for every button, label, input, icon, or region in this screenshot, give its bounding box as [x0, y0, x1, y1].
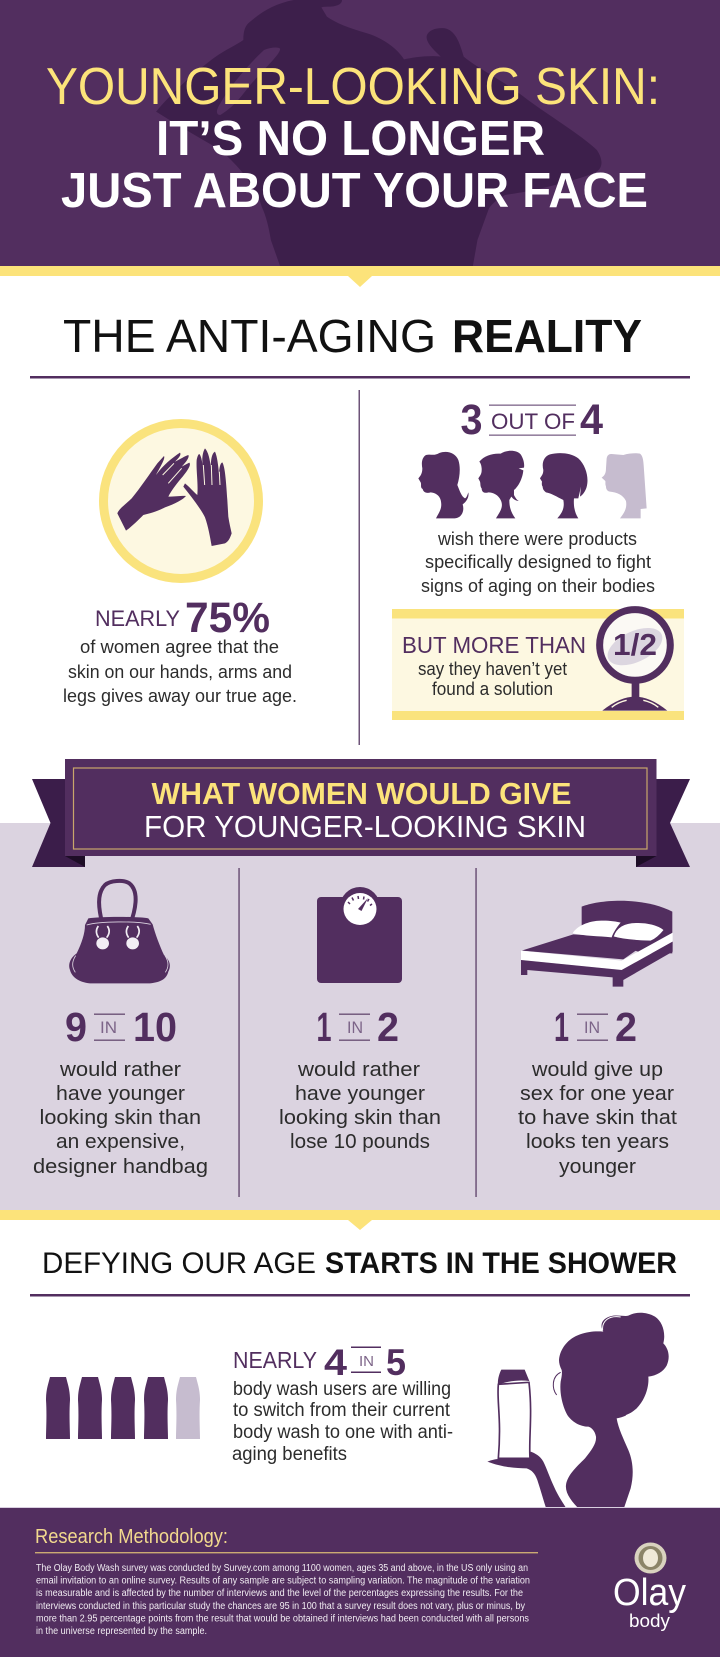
text: methodology: in the universe represented by the sample. [36, 1626, 207, 1637]
stat: 3 out of 4: 4 [580, 396, 603, 444]
icon: bed [521, 901, 673, 987]
text: give up sex [518, 1059, 677, 1178]
stat: 9 in 10: IN [100, 1018, 117, 1037]
title: YOUNGER-LOOKING SKIN: [46, 58, 660, 116]
text: skin gives away age: of women agree that the [80, 637, 279, 657]
text: designer handbag: an expensive, [56, 1131, 185, 1153]
title: IT’S NO LONGER [156, 112, 545, 166]
text: give up sex: would give up [531, 1059, 663, 1081]
text: methodology: email invitation to an online survey. Results of any sample are subject to sampling variation. The magnitude of the variation [36, 1576, 530, 1586]
text: give up sex: younger [559, 1156, 636, 1178]
text: lose 10 pounds: have younger [295, 1083, 425, 1105]
panel: what women would give [0, 759, 720, 1210]
icon: four women heads [418, 451, 647, 518]
stat: 1 in 2 weight: 2 [377, 1004, 399, 1050]
text: skin gives away age: legs gives away our true age. [63, 686, 297, 706]
panel: research methodology footer [0, 1507, 720, 1657]
icon: handbag [69, 881, 170, 983]
title: JUST ABOUT YOUR FACE [61, 164, 648, 218]
stat: 1 in 2 weight [316, 1004, 399, 1050]
heading: defying our age: STARTS IN THE SHOWER [325, 1247, 677, 1280]
yellow band with notch [0, 266, 720, 287]
callout: but more than 1/2: BUT MORE THAN [402, 632, 586, 658]
text: lose 10 pounds [279, 1059, 441, 1153]
icon: mirror: 1/2 [613, 627, 657, 662]
text: body wash users: aging benefits [232, 1444, 347, 1465]
stat: nearly 4 in 5: 5 [386, 1342, 406, 1383]
heading: the anti-aging reality: THE ANTI-AGING [63, 310, 436, 362]
banner: WHAT WOMEN WOULD GIVE [152, 776, 572, 811]
stat: 3 out of 4 [460, 396, 603, 444]
text: methodology [36, 1563, 530, 1637]
logo: olay body: body [629, 1611, 670, 1631]
text: lose 10 pounds: looking skin than [279, 1107, 441, 1129]
heading: defying our age [30, 1247, 690, 1296]
stat: 1 in 2 sex: 1 [554, 1004, 569, 1050]
panel: 3 out of 4 [418, 396, 655, 596]
stat: 9 in 10: 9 [65, 1004, 87, 1050]
title [46, 58, 660, 218]
stat: 3 out of 4: 3 [460, 396, 482, 444]
text: designer handbag: looking skin than [40, 1107, 201, 1129]
text: methodology: is measurable and is affected by the number of interviews and the level of the percentages expressing the results. For the [36, 1588, 523, 1599]
panel: header [0, 0, 720, 287]
text: lose 10 pounds: would rather [297, 1059, 420, 1081]
stat: 3 out of 4: OUT OF [491, 409, 575, 434]
icon: mirror [600, 610, 670, 711]
stat: 1 in 2 weight: IN [347, 1018, 363, 1037]
stat: nearly 4 in 5: 4 [324, 1342, 347, 1383]
stat: 1 in 2 weight: 1 [316, 1004, 332, 1050]
text: body wash users: body wash users are willing [233, 1379, 451, 1400]
icon: five bottles [46, 1377, 200, 1439]
heading: the anti-aging reality [30, 310, 690, 378]
callout: but more than 1/2: found a solution [432, 679, 553, 699]
stat: nearly 4 in 5: IN [359, 1353, 374, 1370]
text: wish there were products: specifically designed to fight [425, 552, 651, 572]
text: skin gives away age [63, 637, 297, 706]
text: designer handbag [33, 1059, 208, 1178]
text: lose 10 pounds: lose 10 pounds [290, 1131, 430, 1153]
heading: defying our age: DEFYING OUR AGE [42, 1247, 316, 1280]
text: give up sex: looks ten years [526, 1131, 669, 1153]
stat: nearly 4 in 5 [233, 1342, 406, 1383]
text: give up sex: sex for one year [520, 1083, 674, 1105]
banner [32, 759, 690, 867]
text: wish there were products: signs of aging on their bodies [421, 576, 655, 596]
text: methodology: The Olay Body Wash survey was conducted by Survey.com among 1100 women, ages 35 and above, in the US only using an [36, 1563, 528, 1574]
stat: 1 in 2 sex [554, 1004, 637, 1050]
panel: shower [46, 1313, 669, 1510]
text: wish there were products [421, 529, 655, 596]
text: body wash users: body wash to one with anti- [233, 1422, 453, 1443]
text: give up sex: to have skin that [518, 1107, 677, 1129]
text: body wash users: to switch from their current [233, 1400, 451, 1421]
icon: bathroom scale [317, 887, 402, 983]
text: designer handbag: would rather [59, 1059, 181, 1081]
banner: FOR YOUNGER-LOOKING SKIN [144, 809, 586, 844]
heading: research methodology: Research Methodology: [35, 1526, 228, 1548]
text: methodology: interviews conducted in this particular study the chances are 95 in 100 that a survey result does not vary, plus or minus, by [36, 1601, 525, 1612]
stat: nearly 75%: NEARLY [95, 606, 180, 631]
silhouette: woman with raised arms [156, 0, 601, 266]
icon: hands in circle [104, 424, 258, 578]
text: wish there were products: wish there were products [437, 529, 637, 549]
panel: nearly 75% [63, 424, 297, 706]
stat: 9 in 10 [65, 1004, 177, 1050]
heading: the anti-aging reality: REALITY [452, 310, 642, 362]
text: body wash users [232, 1379, 453, 1465]
stat: nearly 75%: 75% [185, 594, 270, 642]
icon: woman holding bottle [487, 1313, 669, 1510]
yellow band with notch [0, 1210, 720, 1230]
text: designer handbag: designer handbag [33, 1156, 208, 1178]
stat: 9 in 10: 10 [133, 1004, 177, 1050]
callout: but more than 1/2 [392, 609, 684, 720]
stat: nearly 4 in 5: NEARLY [233, 1347, 317, 1373]
callout: but more than 1/2: say they haven’t yet [418, 659, 567, 679]
logo: olay body [613, 1542, 686, 1631]
stat: 1 in 2 sex: IN [584, 1018, 600, 1037]
text: methodology: more than 2.95 percentage points from the result that would be obtained if interviews had been conducted with all persons [36, 1614, 529, 1624]
text: skin gives away age: skin on our hands, arms and [68, 662, 292, 682]
stat: 1 in 2 sex: 2 [615, 1004, 637, 1050]
stat: nearly 75% [95, 594, 270, 642]
logo: olay body: Olay [613, 1572, 686, 1614]
text: designer handbag: have younger [56, 1083, 185, 1105]
